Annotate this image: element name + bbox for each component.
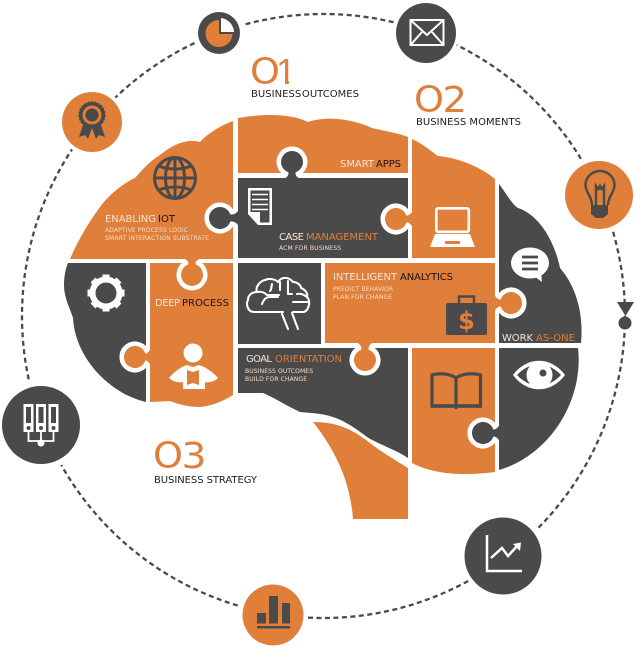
panel: enabling iot bbox=[70, 121, 233, 259]
heading: 01 business outcomes: O bbox=[250, 52, 280, 92]
icon: line chart badge bbox=[461, 514, 545, 598]
puzzle knob: case up into smart apps bbox=[281, 151, 303, 178]
heading: 03 business strategy: 3 bbox=[182, 436, 206, 477]
icon: gear bbox=[88, 274, 124, 312]
heading: 03 business strategy: O bbox=[153, 436, 183, 476]
text: enabling iot: SMART INTERACTION SUBSTRATE bbox=[105, 235, 209, 242]
panel: gear bbox=[64, 263, 146, 402]
label: deep process bbox=[155, 298, 229, 309]
label: work as-one: AS-ONE bbox=[536, 333, 575, 344]
puzzle knob: analytics into work bbox=[494, 292, 522, 314]
text: goal orientation bbox=[245, 354, 342, 383]
heading: 02 business moments: O bbox=[414, 80, 444, 120]
puzzle knob: laptop into case bbox=[385, 208, 412, 230]
panel: brain icon bbox=[238, 263, 321, 344]
text: case management: CASE bbox=[279, 232, 304, 243]
label: smart apps bbox=[340, 159, 401, 170]
puzzle knob: analytics into goal bbox=[354, 342, 376, 371]
icon: envelope badge bbox=[393, 0, 459, 66]
label: work as-one bbox=[502, 333, 575, 344]
label: smart apps: APPS bbox=[376, 159, 401, 170]
puzzle knob: eye into book bbox=[472, 422, 500, 444]
label: smart apps: SMART bbox=[340, 159, 375, 170]
label: work as-one: WORK bbox=[502, 333, 533, 344]
text: intelligent analytics: INTELLIGENT bbox=[333, 272, 398, 283]
label: deep process: PROCESS bbox=[182, 298, 229, 309]
icon: pie chart badge bbox=[194, 8, 244, 58]
puzzle knob: case left into iot bbox=[209, 207, 238, 229]
panel: work as-one bbox=[499, 184, 582, 343]
panel: eye bbox=[499, 348, 579, 470]
panel: intelligent analytics bbox=[325, 263, 495, 343]
panel: book bbox=[412, 348, 495, 474]
panel: smart apps bbox=[238, 115, 408, 173]
text: enabling iot: ENABLING bbox=[105, 214, 156, 225]
heading: 01 business outcomes: BUSINESS OUTCOMES bbox=[251, 89, 359, 100]
icon: ribbon badge bbox=[58, 88, 126, 156]
text: intelligent analytics: ANALYTICS bbox=[400, 272, 453, 283]
heading: 02 business moments: 2 bbox=[442, 80, 467, 121]
text: enabling iot: IOT bbox=[158, 214, 176, 225]
heading: 03 business strategy: BUSINESS STRATEGY bbox=[154, 475, 258, 486]
icon: light bulb badge bbox=[562, 158, 636, 232]
icon: binders badge bbox=[0, 380, 86, 470]
text: goal orientation: BUILD FOR CHANGE bbox=[245, 376, 307, 383]
text: case management bbox=[279, 232, 379, 252]
text: enabling iot bbox=[105, 214, 209, 242]
heading: 01 business outcomes: 1 bbox=[276, 51, 296, 92]
text: goal orientation: ORIENTATION bbox=[275, 354, 342, 365]
label: deep process: DEEP bbox=[155, 298, 180, 309]
panel: laptop bbox=[412, 139, 495, 258]
icon: brain outline bbox=[247, 278, 309, 329]
icon: ring arrow and dot bbox=[617, 302, 634, 330]
text: case management: ACM FOR BUSINESS bbox=[279, 245, 341, 252]
text: enabling iot: ADAPTIVE PROCESS LOGIC bbox=[105, 227, 188, 234]
panel: stem bbox=[313, 422, 408, 519]
icon: bar chart badge bbox=[239, 581, 307, 649]
text: goal orientation: GOAL bbox=[246, 354, 272, 365]
icon: speech bubble bbox=[511, 248, 549, 282]
text: intelligent analytics: PREDICT BEHAVIOR bbox=[333, 286, 393, 293]
heading: 01 business outcomes bbox=[252, 57, 358, 97]
brain puzzle bbox=[64, 115, 582, 519]
panel: goal orientation bbox=[238, 348, 408, 458]
heading: 02 business moments bbox=[414, 80, 521, 128]
icon: globe bbox=[154, 158, 196, 198]
icon: laptop bbox=[430, 208, 475, 247]
icon: eye bbox=[513, 361, 565, 389]
text: intelligent analytics: PLAN FOR CHANGE bbox=[333, 294, 392, 301]
panel: case management bbox=[238, 178, 408, 258]
icon: briefcase: $ bbox=[458, 307, 475, 335]
icon: briefcase bbox=[446, 296, 487, 335]
text: case management: MANAGEMENT bbox=[306, 232, 379, 243]
icon: open book bbox=[431, 374, 482, 409]
icon: document bbox=[248, 188, 272, 225]
heading: 02 business moments: BUSINESS MOMENTS bbox=[416, 117, 521, 128]
icon: person reading bbox=[169, 344, 218, 389]
puzzle knob: deep into gear bbox=[124, 346, 150, 368]
heading: 03 business strategy bbox=[153, 436, 258, 486]
text: goal orientation: BUSINESS OUTCOMES bbox=[245, 368, 313, 375]
text: intelligent analytics bbox=[333, 272, 453, 301]
puzzle knob: iot into deep process bbox=[181, 258, 203, 286]
panel: deep process bbox=[150, 263, 233, 407]
